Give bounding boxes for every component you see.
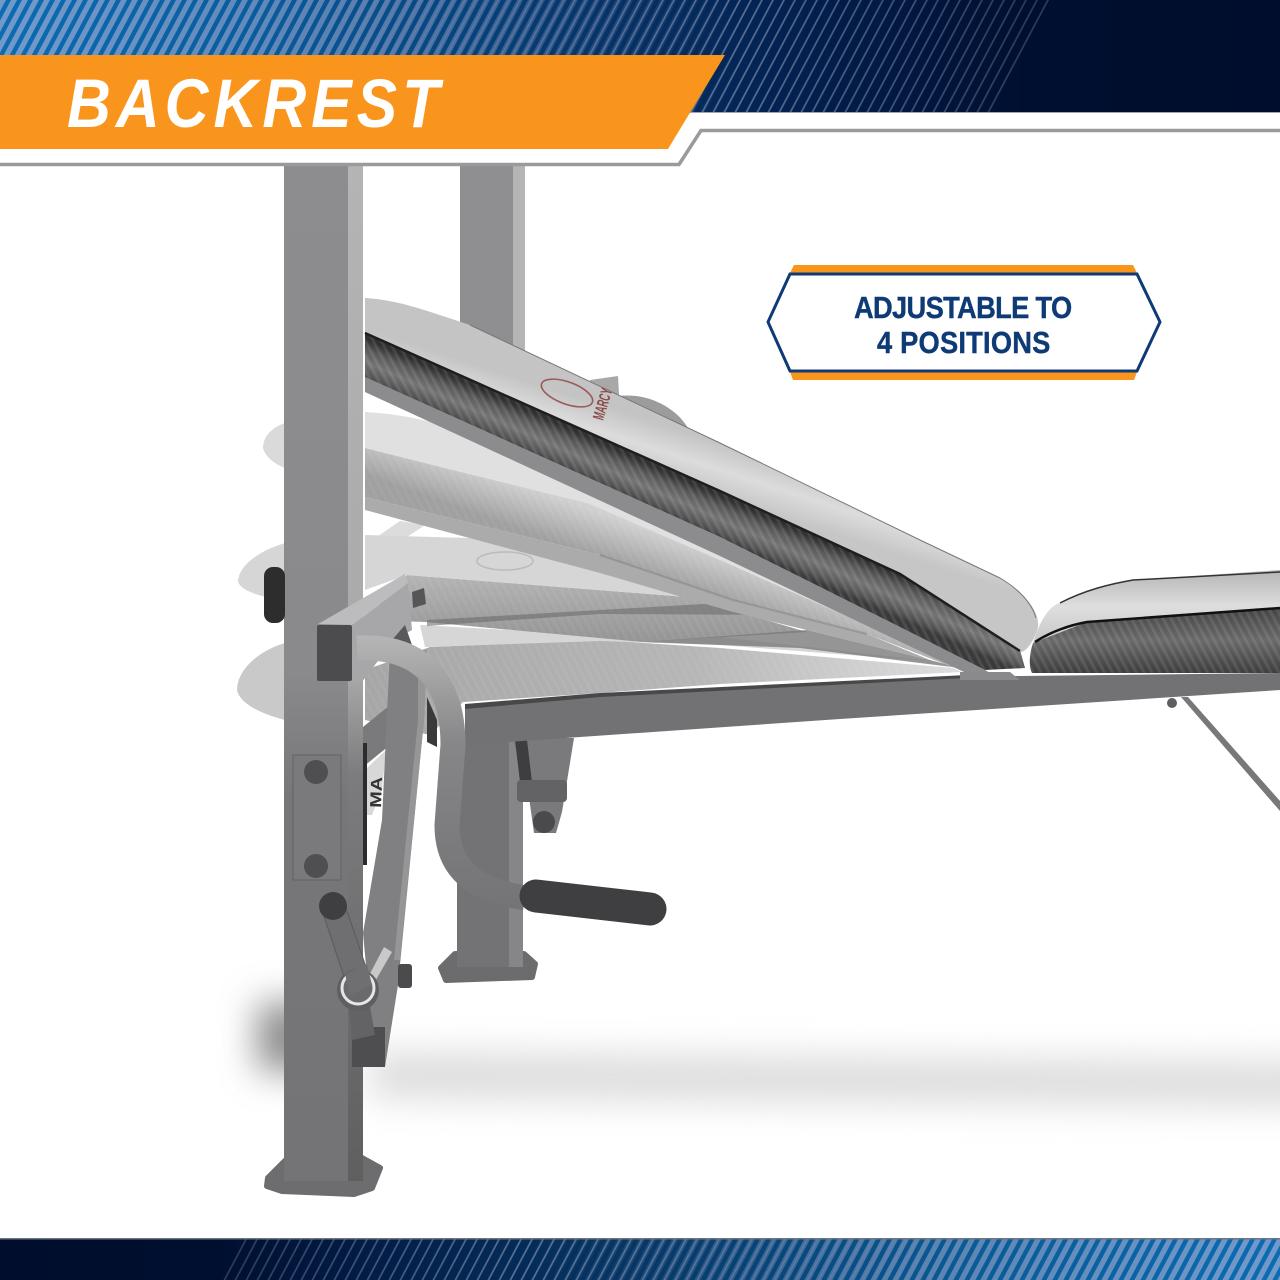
seat frame rail [465,672,1280,745]
title banner [0,55,725,149]
rear upright post upper [460,166,525,366]
locking knob [264,567,285,623]
decal with letters: MA [367,776,386,808]
backrest ghost position 1 (flat) [237,625,962,735]
mounting plate [293,755,341,880]
cross bar [363,705,390,767]
header white cut-in [0,113,1280,166]
main backrest pad side [365,332,1025,670]
backrest ghost position 3 [263,412,960,668]
callout orange bars [790,265,1137,380]
rear pivot bracket [513,738,574,833]
callout text [854,291,1072,360]
callout: adjustable to 4 positions [768,265,1160,380]
floor shadow [258,1003,1280,1108]
brand logo [538,373,616,422]
seat pad [1030,570,1280,673]
callout outline [768,274,1160,371]
rear leg brace [1167,697,1280,811]
decal with letters [367,750,386,815]
main backrest pad top [365,298,1038,652]
lever bracket arm [317,574,426,682]
lever strut [352,650,437,1067]
front foot [267,1158,380,1194]
rear upright post lower and foot [441,735,535,980]
bench illustration [237,166,1280,1194]
header rule line [0,130,1280,164]
main backrest frame strip [365,377,1012,686]
footer band [0,1238,1280,1280]
header band [0,0,1280,114]
backrest ghost position 2 [238,521,960,668]
lever foam grip [536,896,650,909]
callout text: 4 POSITIONS [877,326,1050,360]
logo faint [477,552,533,570]
rear pad bracket [590,376,690,432]
front upright post [284,166,363,1181]
adjustment pin [319,892,379,1040]
lever handle tube [357,648,525,898]
callout text: ADJUSTABLE TO [854,291,1072,325]
title text: BACKREST [67,64,444,142]
brand logo: MARCY [589,386,616,422]
